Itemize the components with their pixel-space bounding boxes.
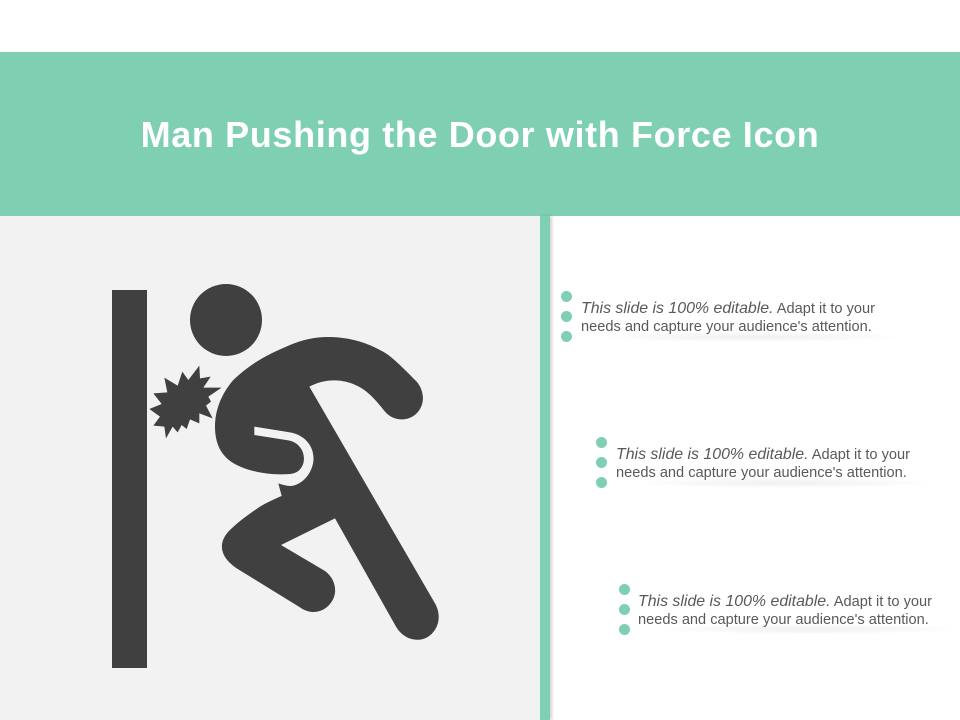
underline shadow — [659, 624, 959, 634]
text block 1 — [561, 291, 875, 342]
bullet dots — [561, 291, 572, 342]
icon: man pushing the door — [112, 284, 439, 668]
caption: This slide is 100% editable. Adapt it to your — [581, 300, 875, 317]
vertical divider bar — [540, 216, 550, 720]
text block 3 — [619, 584, 932, 635]
body — [215, 337, 439, 640]
header band — [0, 52, 960, 216]
head — [190, 284, 262, 356]
underline shadow — [601, 332, 901, 342]
caption: needs and capture your audience's attention. — [616, 465, 907, 481]
caption: needs and capture your audience's attention. — [638, 612, 929, 628]
caption — [581, 300, 875, 335]
caption — [638, 593, 932, 628]
caption: This slide is 100% editable. Adapt it to your — [638, 593, 932, 610]
caption: This slide is 100% editable. Adapt it to your — [616, 446, 910, 463]
caption — [616, 446, 910, 481]
text block 2 — [596, 437, 910, 488]
bullet dots — [596, 437, 607, 488]
impact burst — [149, 366, 222, 438]
door — [112, 290, 147, 668]
title: Man Pushing the Door with Force Icon — [141, 114, 819, 155]
underline shadow — [636, 478, 936, 488]
bullet dots — [619, 584, 630, 635]
panel: icon background — [0, 216, 540, 720]
caption: needs and capture your audience's attention. — [581, 319, 872, 335]
